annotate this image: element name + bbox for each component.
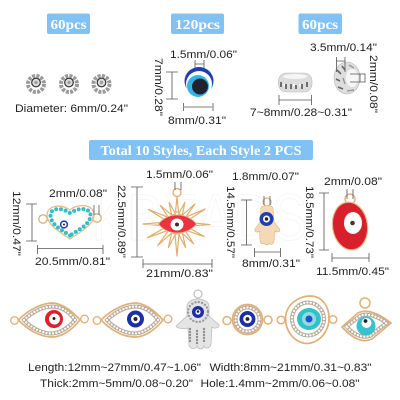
dimensions: evil eye bead <box>152 49 237 127</box>
badge: 60pcs right <box>298 14 342 34</box>
dimensions: sunburst pendant: 1.5mm/0.06" <box>146 169 213 181</box>
dimensions: hamsa pendant: 1.8mm/0.07" <box>232 171 299 183</box>
icon: turquoise heart connector <box>39 206 101 239</box>
dimensions: red oval pendant <box>303 176 389 278</box>
dimensions: sunburst pendant: 22.5mm/0.89" <box>115 185 127 258</box>
label: bead diameter: Diameter: 6mm/0.24" <box>15 103 128 115</box>
icon: white enamel turquoise connector <box>277 296 337 344</box>
dimensions: rondelle <box>250 42 379 119</box>
banner: total styles: Total 10 Styles, Each Style 2 PCS <box>100 144 302 159</box>
dimensions: heart connector: 2mm/0.08" <box>49 188 107 200</box>
dimensions: sunburst pendant: 21mm/0.83" <box>146 268 213 280</box>
dimensions: rondelle: 2mm/0.08" <box>367 55 379 113</box>
dimensions: heart connector <box>10 188 110 268</box>
specification text: Hole:1.4mm~2mm/0.06~0.08" <box>200 378 360 390</box>
dimensions: red oval pendant: 18.5mm/0.73" <box>303 186 315 258</box>
icon: hamsa pendant <box>255 198 280 245</box>
dimensions: hamsa pendant <box>224 171 300 270</box>
badge: 120pcs <box>171 14 224 34</box>
watermark: KBEADS <box>92 180 307 254</box>
dimensions: heart connector: 12mm/0.47" <box>10 191 22 256</box>
dimensions: red oval pendant: 2mm/0.08" <box>324 176 382 188</box>
dimensions: sunburst pendant <box>115 169 213 280</box>
dimensions: hamsa pendant: 14.5mm/0.57" <box>224 186 236 258</box>
icon: silver hamsa connector <box>176 290 219 349</box>
dimensions: heart connector: 20.5mm/0.81" <box>35 256 110 268</box>
icon: sunburst red eye pendant <box>143 188 210 256</box>
dimensions: rondelle: 7~8mm/0.28~0.31" <box>250 107 352 119</box>
icon: turquoise eye pendant <box>342 298 391 341</box>
icon: rhinestone rondelle side view <box>278 73 312 92</box>
badge: 60pcs right: 60pcs <box>302 18 339 33</box>
specification text: Length:12mm~27mm/0.47~1.06" <box>28 362 201 374</box>
specification text <box>28 362 372 390</box>
dimensions: red oval pendant: 11.5mm/0.45" <box>316 266 389 278</box>
dimensions: evil eye bead: 8mm/0.31" <box>168 115 226 127</box>
dimensions: hamsa pendant: 8mm/0.31" <box>242 258 300 270</box>
badge: 60pcs left <box>47 14 90 34</box>
specification text: Width:8mm~21mm/0.31~0.83" <box>210 362 372 374</box>
badge: 120pcs: 120pcs <box>175 18 221 33</box>
icon: daisy spacer beads <box>28 76 110 92</box>
dimensions: evil eye bead: 1.5mm/0.06" <box>170 49 237 61</box>
specification text: Thick:2mm~5mm/0.08~0.20" <box>40 378 193 390</box>
banner: total styles <box>89 140 313 160</box>
icon: round blue eye connector <box>223 304 272 334</box>
icon: red oval pendant <box>329 194 371 252</box>
icon: blue evil eye bead <box>184 67 214 97</box>
icon: rhinestone rondelle angled view <box>334 62 360 94</box>
dimensions: evil eye bead: 7mm/0.28" <box>152 58 164 116</box>
badge: 60pcs left: 60pcs <box>50 18 87 33</box>
icon: red eye connector <box>11 303 88 337</box>
dimensions: rondelle: 3.5mm/0.14" <box>310 42 377 54</box>
icon: blue eye connector <box>93 303 172 337</box>
